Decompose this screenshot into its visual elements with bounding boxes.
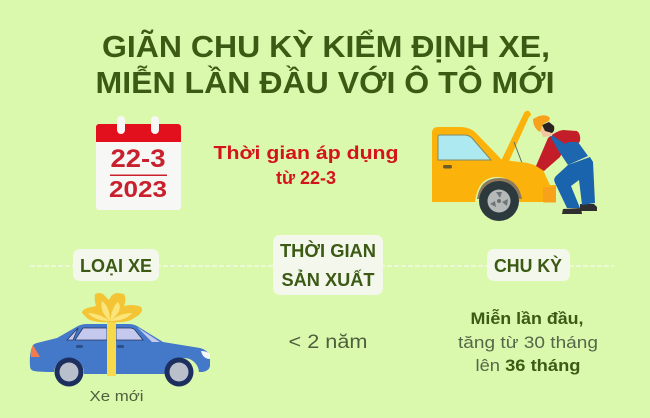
car hood [501, 111, 531, 161]
mechanic torso and arm [536, 130, 580, 171]
label: new car: Xe mới [90, 388, 144, 405]
ribbon [107, 322, 116, 376]
front wheel [54, 358, 84, 386]
title [96, 29, 554, 100]
headlight [201, 351, 210, 359]
mechanic legs [554, 157, 595, 208]
cycle text: tăng từ 30 tháng [458, 333, 598, 352]
cycle text: Miễn lần đầu, [470, 309, 584, 328]
production time value: < 2 năm [288, 332, 368, 353]
windshield [137, 327, 160, 342]
car body [432, 127, 556, 202]
side windows [67, 328, 143, 340]
wheel [477, 178, 522, 199]
heading pill: production time: SẢN XUẤT [282, 269, 375, 290]
icon: new car with gift bow [30, 293, 210, 386]
icon: calendar: 22-3 [110, 145, 166, 173]
application time text: Thời gian áp dụng [214, 143, 398, 163]
application time text [214, 143, 398, 188]
title: MIỄN LẦN ĐẦU VỚI Ô TÔ MỚI [96, 64, 554, 100]
heading pill: vehicle type: LOẠI XE [80, 255, 152, 276]
bow [82, 293, 142, 322]
cycle text [458, 309, 598, 375]
heading pill: cycle: CHU KỲ [494, 255, 563, 276]
mechanic boots [562, 204, 597, 214]
heading pill: cycle [487, 249, 570, 281]
title: GIÃN CHU KỲ KIỂM ĐỊNH XE, [102, 29, 550, 64]
rear wheel [164, 358, 194, 386]
cycle text: lên 36 tháng [476, 356, 580, 375]
application time text: từ 22-3 [276, 168, 336, 188]
car body [30, 324, 210, 374]
icon: calendar: 2023 [109, 176, 167, 202]
heading pill: production time [273, 235, 383, 295]
mechanic head and helmet [540, 125, 553, 137]
heading pill: production time: THỜI GIAN [280, 240, 376, 261]
icon: mechanic repairing car [432, 111, 597, 221]
icon: calendar [96, 116, 181, 210]
mechanic overalls [550, 135, 588, 165]
taillight [31, 345, 40, 357]
dashed divider [30, 265, 614, 267]
heading pill: vehicle type [73, 249, 159, 281]
